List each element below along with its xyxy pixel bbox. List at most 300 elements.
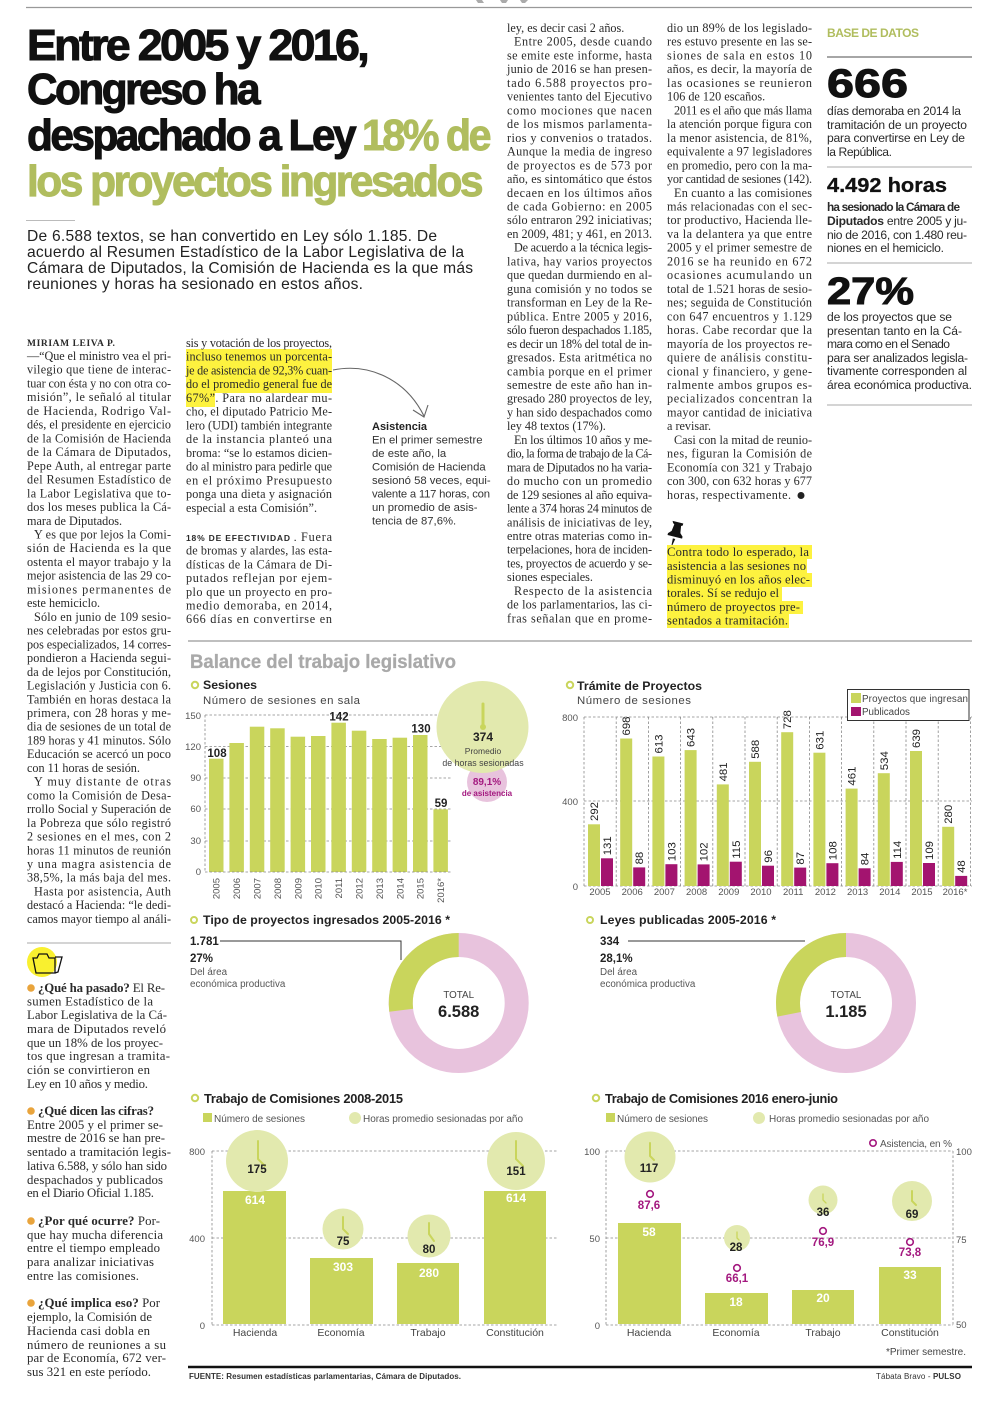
stat: 27%: mara como en el Senado <box>827 337 950 351</box>
chart: trámite de proyectos: Trámite de Proyectos <box>577 679 702 693</box>
subtitle: reuniones y horas ha sesionado en estos años. <box>27 276 363 293</box>
chart: sesiones: 120 <box>185 742 201 753</box>
chart: trabajo de comisiones 2008-2015: Trabajo de Comisiones 2008-2015 <box>204 1091 403 1106</box>
article column 1: misión”, le señaló al titular <box>27 390 171 404</box>
chart: tipo de proyectos ingresados: 1.781 <box>190 936 219 948</box>
chart: trámite de proyectos: 115 <box>731 841 743 859</box>
chart: sesiones: 2010 <box>314 878 325 899</box>
chart: trabajo de comisiones 2008-2015: 0 <box>200 1321 205 1332</box>
article column 1: 38,5%, la más baja del mes. <box>27 871 171 885</box>
title: 18% de <box>362 112 490 160</box>
article column 4: 106 de 120 escaños. <box>667 90 765 104</box>
article column 1: con 11 horas de sesión. <box>27 761 140 775</box>
article column 4: horas, respectivamente. <box>667 488 791 502</box>
chart: trámite de proyectos: 2016* <box>943 887 968 898</box>
title: despachado a Ley <box>27 112 356 160</box>
chart: trabajo de comisiones 2016: 100 <box>956 1147 972 1158</box>
chart: sesiones: Número de sesiones en sala <box>203 695 361 707</box>
chart: sesiones <box>185 678 528 903</box>
article column 1: mejor asistencia de las 29 co- <box>27 569 171 583</box>
question: qué ha pasado: que un 18% de los proyec- <box>27 1036 163 1050</box>
article column 4: Economía con 321 y Trabajo <box>667 460 812 474</box>
article column 2: je de asistencia de 92,3% cuan- <box>185 364 332 378</box>
article column 3: lativa, hay varios proyectos <box>507 254 652 268</box>
article column 1: pos especializados, 14 corres- <box>27 637 171 651</box>
stat: 27%: presentan tanto en la Cá- <box>827 324 962 338</box>
article column 4: más relacionadas con el sec- <box>667 200 812 214</box>
chart: leyes publicadas <box>587 913 904 1061</box>
question: por qué ocurre: entre el tiempo empleado <box>27 1241 160 1255</box>
question: por qué ocurre: ¿Por qué ocurre? Por- <box>38 1214 160 1228</box>
question: qué ha pasado: ción se convirtieron en <box>27 1063 151 1077</box>
chart: trabajo de comisiones 2016: 20 <box>816 1291 830 1305</box>
chart: trámite de proyectos: 613 <box>653 734 665 754</box>
article column 3: semestre de este año han in- <box>507 378 652 392</box>
article column 2: en el próximo Presupuesto <box>186 473 332 487</box>
article column 2: 67%”. Para no alardear mu- <box>186 391 332 405</box>
title: los proyectos ingresados <box>27 158 482 206</box>
callout: horas sesionadas: de horas sesionadas <box>442 758 524 768</box>
section heading: Balance del trabajo legislativo <box>190 652 456 673</box>
chart: trámite de proyectos: 728 <box>782 710 794 729</box>
legend: Publicados <box>862 707 910 718</box>
stat: 666: 666 <box>827 62 908 106</box>
article column 4: ralmente ambos grupos es- <box>667 378 812 392</box>
chart: trámite de proyectos: 114 <box>892 841 904 859</box>
chart: sesiones: 130 <box>411 724 431 736</box>
stat: 666: tramitación de un proyecto <box>827 118 967 132</box>
chart: trabajo de comisiones 2008-2015: 175 <box>247 1164 267 1176</box>
chart: trabajo de comisiones 2016: 58 <box>642 1225 656 1239</box>
article column 4: cional y financiero, y gene- <box>667 364 812 378</box>
chart: leyes publicadas: 28,1% <box>600 953 633 965</box>
article column 2: putados reflejan por ejem- <box>186 571 332 585</box>
chart: trabajo de comisiones 2008-2015: 400 <box>189 1234 205 1245</box>
stat: 666: la República. <box>827 145 892 159</box>
article column 3: pública. Entre 2005 y 2016, <box>507 309 652 323</box>
chart: trabajo de comisiones 2008-2015: Número de sesiones <box>214 1114 305 1125</box>
chart: leyes publicadas: 334 <box>600 936 620 948</box>
question: por qué ocurre: entre las comisiones. <box>27 1269 139 1283</box>
subtitle <box>27 228 473 293</box>
article column 1: mara de Diputados. <box>27 514 122 528</box>
chart: trabajo de comisiones 2016: Trabajo <box>805 1327 841 1339</box>
note: Asistencia: tencia de 87,6%. <box>372 516 456 528</box>
chart: trámite de proyectos: 131 <box>602 836 614 855</box>
article column 2: broma: “se lo estamos dicien- <box>186 446 332 460</box>
article column 4: equivalente a 97 legisladores <box>667 145 812 159</box>
chart: trámite de proyectos: 534 <box>879 751 891 770</box>
callout: highlighted note: asistencia a las sesiones no <box>667 559 806 573</box>
article column 1: Y muy distante de otras <box>34 775 171 789</box>
chart: sesiones: Sesiones <box>203 678 257 692</box>
stat: 4.492 horas: nio de 2016, con 1.480 reu- <box>827 228 967 242</box>
question: qué implica eso: número de reuniones a su <box>27 1338 167 1352</box>
article column 4: la atención porque figura con <box>667 117 812 131</box>
chart: trabajo de comisiones 2008-2015: 303 <box>333 1260 353 1274</box>
article column 3: transforman en Ley de la Re- <box>507 296 652 310</box>
chart: sesiones: 2007 <box>252 878 264 899</box>
article column 3: dio, la forma de trabajo de la Cá- <box>507 447 652 461</box>
question: qué implica eso <box>27 1296 167 1379</box>
article column 1: Legislación y Justicia con 6. <box>27 678 171 692</box>
article column 4: dio un 89% de los legislado- <box>667 21 812 35</box>
article column 2: do el promedio general fue de <box>186 377 332 391</box>
note: Asistencia: Comisión de Hacienda <box>372 462 486 474</box>
question: qué ha pasado <box>27 981 170 1091</box>
chart: leyes publicadas: Leyes publicadas 2005-2016 * <box>600 913 776 927</box>
article column 4: las ocasiones se reunieron <box>667 76 812 90</box>
question: qué ha pasado: sumen Estadístico de la <box>27 994 153 1008</box>
question: qué implica eso: ejemplo, la Comisión de <box>27 1310 152 1324</box>
article column 1: dos los meses publica la Cá- <box>27 500 171 514</box>
article column 1: la Pobreza que sólo registró <box>27 816 171 830</box>
chart: trámite de proyectos: 631 <box>814 731 826 750</box>
chart: trabajo de comisiones 2016: 73,8 <box>899 1247 922 1259</box>
article column 3: sólo fueron despachados 1.185, <box>507 323 652 337</box>
callout: highlighted note: Contra todo lo esperado, la <box>667 545 809 559</box>
article column 4: En cuanto a las comisiones <box>674 186 812 200</box>
article column 3: sólo entraron 292 iniciativas; <box>507 213 652 227</box>
chart: trabajo de comisiones 2016: 75 <box>956 1235 967 1246</box>
stat: 27%: tivamente corresponden al <box>827 364 967 378</box>
article column 1: Pepe Auth, al entregar parte <box>27 459 171 473</box>
chart: trabajo de comisiones 2016: 50 <box>589 1234 600 1245</box>
article column 3: rios y convenios o tratados. <box>507 131 652 145</box>
chart: sesiones: 59 <box>435 798 447 810</box>
question: qué implica eso: ¿Qué implica eso? Por <box>38 1296 161 1310</box>
stat: 27% <box>827 271 972 392</box>
chart: trabajo de comisiones 2008-2015: 80 <box>423 1244 435 1256</box>
chart: trámite de proyectos: 88 <box>634 852 646 864</box>
chart: leyes publicadas: 1.185 <box>825 1003 867 1021</box>
stat: 27%: de los proyectos que se <box>827 310 952 324</box>
article column 4: horas. Cabe recordar que la <box>667 323 813 337</box>
article column 1: este hemiciclo. <box>27 596 100 610</box>
callout: highlighted note: sentados a tramitación. <box>667 614 788 628</box>
article column 2: especial a esta Comisión”. <box>186 501 317 515</box>
question: por qué ocurre <box>27 1214 163 1283</box>
chart: trámite de proyectos: 2005 <box>589 887 611 898</box>
article column 1: Sólo en junio de 109 sesio- <box>34 610 171 624</box>
chart: trámite de proyectos: 0 <box>573 882 578 893</box>
chart: trámite de proyectos: 280 <box>943 805 955 824</box>
question: qué ha pasado: tos que ingresan a tramita- <box>27 1049 170 1063</box>
chart: sesiones: 0 <box>196 867 201 878</box>
chart: trámite de proyectos: 2006 <box>622 887 643 898</box>
legend <box>848 690 969 720</box>
callout: asistencia: 89,1% <box>473 777 501 788</box>
icon: folder <box>27 947 62 977</box>
article column 3: tes, proyectos de acuerdo y se- <box>507 556 652 570</box>
panel: preguntas clave <box>27 981 171 1379</box>
article column 4: nes; seguida de Constitución <box>667 296 812 310</box>
question: qué ha pasado: Ley en 10 años y medio. <box>27 1077 148 1091</box>
question: qué implica eso: sus 321 en este período. <box>27 1365 151 1379</box>
article column 3: lente a 374 horas 24 minutos de <box>507 502 652 516</box>
chart: sesiones: 30 <box>190 836 201 847</box>
article column 4: res estuvo presente en las se- <box>667 35 812 49</box>
article column 2: de la instancia planteó una <box>186 432 333 446</box>
chart: sesiones: 2014 <box>395 878 406 899</box>
chart: trámite de proyectos: 2008 <box>686 887 707 898</box>
note: Asistencia: Asistencia <box>372 421 428 433</box>
chart: trabajo de comisiones 2016 <box>584 1091 972 1358</box>
chart: trabajo de comisiones 2016: 66,1 <box>726 1273 749 1285</box>
article column 1 <box>26 339 172 926</box>
chart: trámite de proyectos: Número de sesiones <box>577 695 691 707</box>
article column 1: dés, el presidente en ejercicio <box>27 418 171 432</box>
question: por qué ocurre: para analizar iniciativas <box>27 1255 154 1269</box>
stat: 4.492 horas: 4.492 horas <box>827 175 947 197</box>
article column 2: medio demoraba, en 2014, <box>186 599 332 613</box>
source note: FUENTE: Resumen estadísticas parlamentarias, Cámara de Diputados. <box>189 1372 461 1381</box>
article column 3: de cada Gobierno: en 2005 <box>507 200 652 214</box>
article column 1: ostenta el mayor trabajo y la <box>27 555 172 569</box>
article column 4: en promedio, pero con la ma- <box>667 158 812 172</box>
chart: trabajo de comisiones 2016: 33 <box>903 1268 917 1282</box>
article column 3: Entre 2005, desde cuando <box>514 35 652 49</box>
arrow: to Asistencia note <box>333 368 428 417</box>
article column 1: como la Comisión de Desa- <box>27 788 171 802</box>
chart: tipo de proyectos ingresados: 27% <box>190 953 213 965</box>
article column 3: como mociones que nacen <box>507 103 652 117</box>
article column 4: siones de sala en estos 10 <box>667 48 812 62</box>
article column 4: años, es decir, la mayoría de <box>667 62 812 76</box>
article column 2: dísticas de la Cámara de Di- <box>186 558 332 572</box>
article column 1: pondieron a Hacienda segui- <box>27 651 171 665</box>
question: qué dicen las cifras: despachados y publicados <box>27 1173 163 1187</box>
article column 1: tuar con ésta y no con otra co- <box>27 376 171 390</box>
article column 3: siones especiales. <box>507 570 593 584</box>
chart: trámite de proyectos: 102 <box>699 842 711 861</box>
article column 3: fras señalan que en prome- <box>507 611 652 625</box>
highlight: 92,3% attendance <box>186 349 332 407</box>
article column 4: con 647 encuentros y 1.129 <box>667 309 812 323</box>
article column 4: con 300, con 632 horas y 677 <box>667 474 812 488</box>
question: qué ha pasado: mara de Diputados reveló <box>27 1022 166 1036</box>
stat: 4.492 horas: ha sesionado la Cámara de <box>827 200 960 214</box>
chart: trabajo de comisiones 2016: 76,9 <box>812 1237 834 1249</box>
chart: trámite de proyectos: 481 <box>718 762 730 781</box>
chart: trabajo de comisiones 2008-2015: Horas promedio sesionadas por año <box>363 1114 523 1125</box>
chart: trámite de proyectos: 2015 <box>911 887 933 898</box>
chart: trabajo de comisiones 2016: Constitución <box>881 1327 939 1339</box>
chart: sesiones: 2011 <box>334 878 345 898</box>
callout: asistencia <box>462 762 513 802</box>
article column 1: MIRIAM LEIVA P. <box>27 339 115 349</box>
callout: highlighted note: torales. Sí se redujo el <box>667 586 780 600</box>
chart: trabajo de comisiones 2016: 87,6 <box>638 1200 660 1212</box>
chart: sesiones: 2008 <box>273 878 284 899</box>
article column 3: ley 48 textos (17%). <box>507 419 606 433</box>
chart: tipo de proyectos ingresados <box>190 913 517 1061</box>
article column 3: entre otras materias como in- <box>507 529 652 543</box>
chart: trámite de proyectos: 48 <box>956 860 968 873</box>
chart: trámite de proyectos: 588 <box>750 740 762 759</box>
chart: sesiones: 2012 <box>354 878 366 899</box>
chart: trabajo de comisiones 2016: Número de sesiones <box>617 1114 708 1125</box>
question: qué dicen las cifras: mestre de 2016 se han pre- <box>27 1131 165 1145</box>
chart: sesiones: 2015 <box>416 878 427 899</box>
chart: trabajo de comisiones 2008-2015: 75 <box>337 1236 350 1248</box>
article column 4: va la delantera ya que entre <box>667 227 812 241</box>
article column 3: venientes tanto del Ejecutivo <box>507 90 652 104</box>
article column 1: de la Cámara de Diputados, <box>27 445 171 459</box>
question: qué ha pasado: ¿Qué ha pasado? El Re- <box>38 981 165 995</box>
article column 3: de 129 sesiones al año equiva- <box>507 488 652 502</box>
chart: sesiones: 90 <box>190 773 201 784</box>
note: Asistencia: valente a 117 horas, con <box>372 488 490 500</box>
article column 1: y una magra asistencia de <box>27 857 171 871</box>
stat: 4.492 horas: Diputados entre 2005 y ju- <box>827 214 967 228</box>
article column 1: Y es que por lejos la Comi- <box>34 528 171 542</box>
chart: trámite de proyectos: 109 <box>924 841 936 860</box>
article column 4: 2016 se ha reunido en 672 <box>667 254 812 268</box>
article column 1: sión de Hacienda es la que <box>27 541 171 555</box>
article column 3: análisis de iniciativas de ley, <box>507 515 652 529</box>
stat: 27%: para ser analizados legisla- <box>827 351 968 365</box>
chart: trabajo de comisiones 2016: 50 <box>956 1320 967 1331</box>
chart: trámite de proyectos: 800 <box>562 713 578 724</box>
article column 3: De acuerdo a la técnica legis- <box>514 241 652 255</box>
article column 2: incluso tenemos un porcenta- <box>186 350 332 364</box>
note: Asistencia: En el primer semestre <box>372 434 482 446</box>
legend: Proyectos que ingresan <box>862 694 968 705</box>
article column 3: de los parlamentarios, las ci- <box>507 598 652 612</box>
chart: trámite de proyectos <box>562 679 972 898</box>
callout: highlighted note: número de proyectos pre- <box>667 600 800 614</box>
chart: trabajo de comisiones 2008-2015: 151 <box>506 1166 526 1178</box>
article column 2: de bromas y alardes, las esta- <box>186 544 332 558</box>
chart: trabajo de comisiones 2008-2015: 280 <box>419 1266 439 1280</box>
article column 1: horas 11 minutos de reunión <box>27 843 171 857</box>
chart: leyes publicadas: Del área <box>600 967 638 978</box>
article column 3: año, es sintomático que éstos <box>507 172 652 186</box>
article column 2: cho, el diputado Patricio Me- <box>186 405 332 419</box>
article column 3: do mucho con un promedio <box>507 474 652 488</box>
article column 3: junio de 2016 se han presen- <box>506 62 652 76</box>
callout: horas sesionadas: 374 <box>473 730 493 744</box>
article column 1: camos mayor tiempo al análi- <box>27 912 171 926</box>
article column 4: la menor asistencia, de 81%, <box>667 131 812 145</box>
question: qué dicen las cifras: Entre 2005 y el primer se- <box>27 1118 163 1132</box>
question: qué implica eso: par de Economía, 672 ver- <box>27 1351 166 1365</box>
chart: trabajo de comisiones 2008-2015: 614 <box>506 1191 526 1205</box>
callout: highlighted note: disminuyó en los años elec- <box>667 572 810 586</box>
chart: tipo de proyectos ingresados: 6.588 <box>438 1003 479 1021</box>
article column 3: y han sido despachados como <box>507 405 652 419</box>
chart: trámite de proyectos: 2012 <box>815 887 836 898</box>
article column 4: nes, figuran la Comisión de <box>667 447 812 461</box>
title: Entre 2005 y 2016, <box>27 22 368 70</box>
stat: 4.492 horas: niones en el hemiciclo. <box>827 241 944 255</box>
article column 4 <box>667 21 813 502</box>
question: qué dicen las cifras: lativa 6.588, y sólo han sido <box>27 1159 167 1173</box>
title: Congreso ha <box>27 66 261 114</box>
chart: trámite de proyectos: 2009 <box>718 887 739 898</box>
chart: trabajo de comisiones 2008-2015: 800 <box>189 1147 205 1158</box>
note: Asistencia <box>372 421 491 528</box>
article column 4: mayoría de los proyectos re- <box>667 337 812 351</box>
note: Asistencia: un promedio de asis- <box>372 502 478 514</box>
chart: sesiones: 142 <box>329 712 349 724</box>
note: Asistencia: de este año, la <box>372 448 447 460</box>
article column 3: terpelaciones, hora de inciden- <box>507 543 652 557</box>
chart: trámite de proyectos: 639 <box>911 729 923 748</box>
chart: sesiones: 2013 <box>375 878 386 899</box>
article column 1: vilegio que tiene de interac- <box>27 363 171 377</box>
article column 1: de Hacienda, Rodrigo Val- <box>27 404 171 418</box>
chart: leyes publicadas: económica productiva <box>600 979 696 990</box>
article column 3: que quedan durmiendo en al- <box>507 268 652 282</box>
chart: trámite de proyectos: 2014 <box>879 887 900 898</box>
chart: trabajo de comisiones 2016: 18 <box>729 1295 743 1309</box>
chart: tipo de proyectos ingresados: TOTAL <box>443 990 475 1001</box>
chart: trabajo de comisiones 2016: Trabajo de Comisiones 2016 enero-junio <box>605 1091 838 1106</box>
chart: trabajo de comisiones 2016: 28 <box>730 1242 743 1254</box>
article column 3: gresado 280 proyectos de ley, <box>507 392 652 406</box>
article column 4: Casi con la mitad de reunio- <box>674 433 812 447</box>
article column 1: Hasta por asistencia, Auth <box>34 884 171 898</box>
article column 2 <box>185 336 333 626</box>
chart: trabajo de comisiones 2016: 69 <box>906 1209 918 1221</box>
chart: trámite de proyectos: 2007 <box>654 887 675 898</box>
stat: 666: días demoraba en 2014 la <box>827 104 961 118</box>
chart: trámite de proyectos: 698 <box>621 716 633 736</box>
chart: trámite de proyectos: 292 <box>589 802 601 821</box>
article column 2: sis y votación de los proyectos, <box>186 336 332 350</box>
article column 4: yor cantidad de sesiones (142). <box>667 172 812 186</box>
article column 1: rrollo Social y Superación de <box>27 802 171 816</box>
chart: tipo de proyectos ingresados: Del área <box>190 967 228 978</box>
chart: sesiones: 60 <box>190 804 201 815</box>
chart: trámite de proyectos: 87 <box>795 852 807 865</box>
subtitle: De 6.588 textos, se han convertido en Ley sólo 1.185. De <box>27 228 437 245</box>
chart: trabajo de comisiones 2016: 36 <box>817 1207 829 1219</box>
chart: trabajo de comisiones 2008-2015: Economía <box>317 1327 365 1339</box>
chart: sesiones: 2006 <box>232 878 243 899</box>
chart: trabajo de comisiones 2008-2015: 614 <box>245 1193 265 1207</box>
callout: asistencia: de asistencia <box>462 789 513 798</box>
chart: trámite de proyectos: 103 <box>666 842 678 861</box>
article column 3: Respecto de la asistencia <box>514 584 653 598</box>
article column 1: del Resumen Estadístico de <box>27 473 171 487</box>
chart: trabajo de comisiones 2016: Asistencia, en % <box>880 1139 952 1150</box>
article column 1: de la Comisión de Hacienda <box>27 431 172 445</box>
article column 2: ponga una dieta y asignación <box>186 487 332 501</box>
chart: trámite de proyectos: 2010 <box>750 887 772 898</box>
article column 1: dia de sesiones de un total de <box>27 720 171 734</box>
chart: sesiones: 2016* <box>436 878 447 903</box>
article column 3: se emite este informe, hasta <box>507 48 653 62</box>
stat: 27%: 27% <box>827 271 914 313</box>
chart: trabajo de comisiones 2016: Economía <box>712 1327 760 1339</box>
article column 1: la Labor Legislativa que to- <box>27 486 171 500</box>
chart: trámite de proyectos: 108 <box>827 841 839 860</box>
article column 4: pecializados concentran la <box>667 392 813 406</box>
subtitle: Cámara de Diputados, la Comisión de Hacienda es la que más <box>27 260 473 277</box>
callout: horas sesionadas: Promedio <box>465 746 501 756</box>
sidebar heading: BASE DE DATOS <box>827 26 919 40</box>
question: qué ha pasado: Labor Legislativa de la Cá- <box>27 1008 167 1022</box>
note: Asistencia: sesionó 58 veces, equi- <box>372 475 491 487</box>
chart: trámite de proyectos: 2013 <box>847 887 868 898</box>
chart: trabajo de comisiones 2008-2015: Hacienda <box>233 1327 277 1339</box>
article column 1: misiones permanentes de <box>27 582 171 596</box>
article column 4: 2005 y el primer semestre de <box>667 241 812 255</box>
question: por qué ocurre: que hay mucha diferencia <box>27 1228 163 1242</box>
